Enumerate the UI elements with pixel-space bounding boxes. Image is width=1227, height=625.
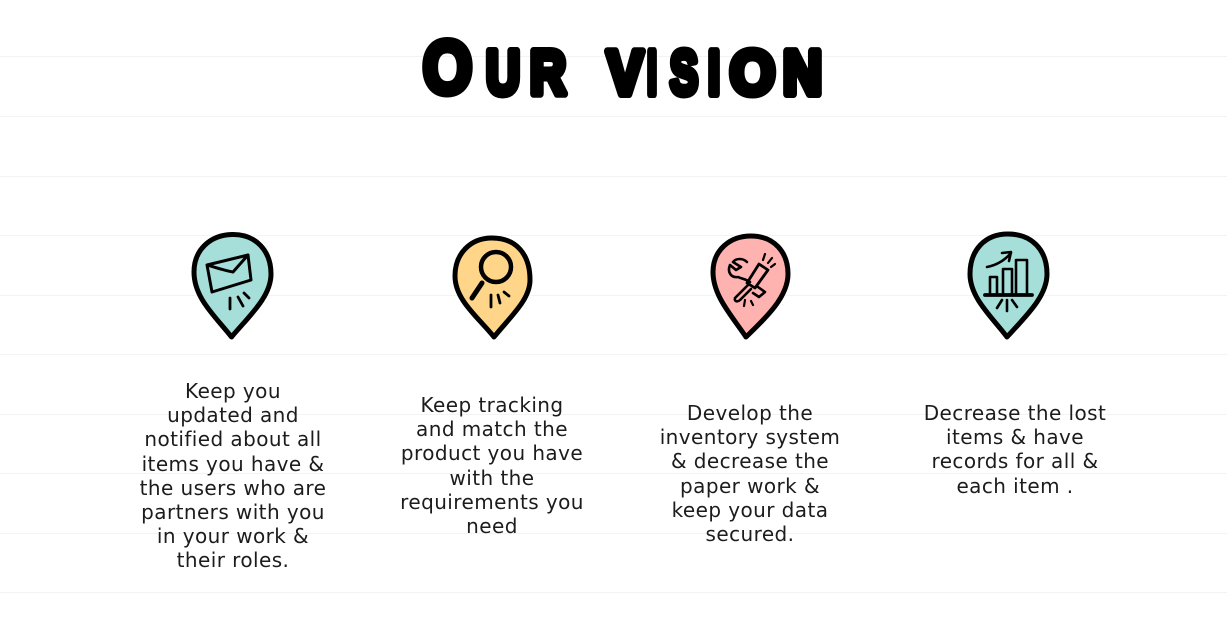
text: column 1: items you have & — [142, 452, 324, 476]
text: column 3: secured. — [706, 522, 794, 546]
text: column 2: and match the — [416, 417, 568, 441]
text: column 1: in your work & — [157, 524, 309, 548]
text: column 3: Develop the — [687, 401, 813, 425]
text: column 3: & decrease the — [671, 449, 829, 473]
text: column 1: the users who are — [140, 476, 326, 500]
text: column 4 — [924, 401, 1106, 498]
title: N — [783, 39, 822, 108]
title: S — [670, 39, 698, 108]
icon: pink pin with wrench and screwdriver — [713, 236, 788, 337]
text: column 2: requirements you — [400, 490, 584, 514]
text: column 4: items & have — [946, 425, 1084, 449]
title: R — [530, 39, 566, 108]
title: O — [423, 26, 472, 109]
text: column 3 — [660, 401, 840, 546]
text: column 2 — [400, 393, 584, 538]
text: column 3: inventory system — [660, 425, 840, 449]
text: column 2: product you have — [401, 441, 583, 465]
text: column 3: keep your data — [672, 498, 828, 522]
text: column 4: each item . — [956, 474, 1074, 498]
text: column 2: Keep tracking — [420, 393, 564, 417]
text: column 1: Keep you — [185, 379, 281, 403]
text: column 4: records for all & — [932, 449, 1098, 473]
text: column 4: Decrease the lost — [924, 401, 1106, 425]
text: column 1 — [140, 379, 326, 572]
text: column 3: paper work & — [680, 474, 820, 498]
text: column 1: notified about all — [144, 427, 322, 451]
icon: teal pin with bar chart — [970, 234, 1047, 337]
title: I — [708, 39, 720, 108]
title: V — [607, 39, 643, 108]
title: U — [486, 39, 520, 108]
icon: orange pin with magnifier — [455, 238, 530, 337]
title — [423, 26, 822, 109]
text: column 1: their roles. — [177, 548, 289, 572]
icon: teal pin with envelope — [194, 234, 271, 337]
text: column 2: with the — [450, 466, 534, 490]
text: column 1: partners with you — [141, 500, 325, 524]
title: I — [647, 39, 657, 108]
title: O — [730, 39, 775, 108]
text: column 2: need — [466, 514, 518, 538]
text: column 1: updated and — [167, 403, 299, 427]
